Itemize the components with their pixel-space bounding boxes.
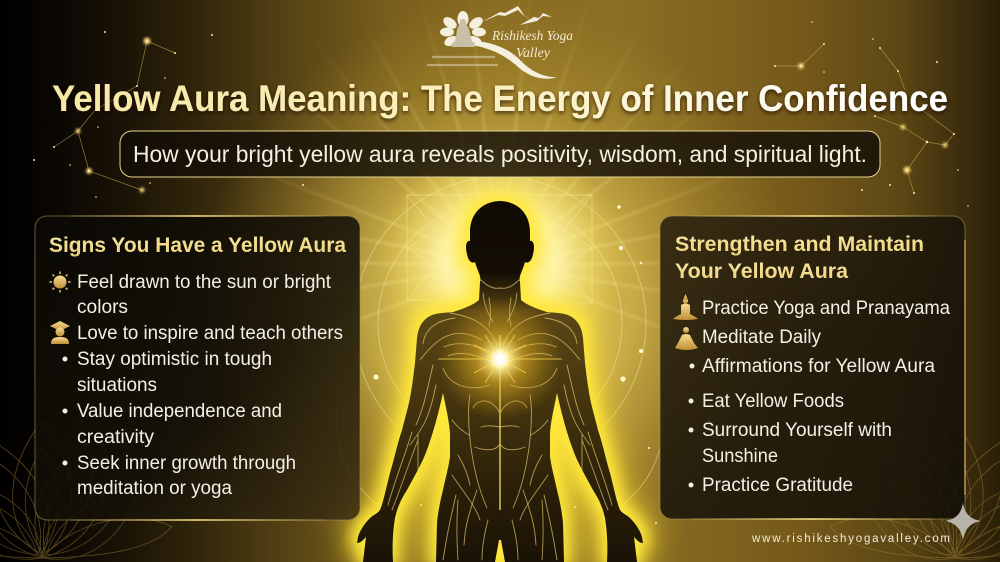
- website url: www.rishikeshyogavalley.com: [751, 533, 950, 545]
- icon: sun: [50, 272, 70, 292]
- list item continuation: Sunshine: [702, 446, 778, 467]
- bullets: [688, 364, 694, 488]
- list item: Love to inspire and teach others: [77, 323, 343, 344]
- list item: Practice Gratitude: [702, 475, 853, 496]
- panel: strengthen: [660, 216, 965, 519]
- logo swoosh: [477, 41, 557, 79]
- logo name second line: Valley: [516, 45, 550, 60]
- list item: Eat Yellow Foods: [702, 391, 844, 412]
- heart star glow: [438, 297, 562, 421]
- subtitle pill: How your bright yellow aura reveals positivity, wisdom, and spiritual light.: [133, 141, 867, 167]
- heading line one: Strengthen and Maintain: [675, 232, 924, 256]
- logo mountains: [482, 6, 552, 25]
- energy lines: [388, 280, 612, 560]
- list item: Feel drawn to the sun or bright: [77, 272, 332, 293]
- human figure silhouette: [357, 201, 643, 562]
- subtitle pill: [120, 131, 880, 177]
- list item continuation: creativity: [77, 427, 155, 448]
- panel: signs: [35, 216, 360, 520]
- list item: Practice Yoga and Pranayama: [702, 298, 950, 319]
- list item: Seek inner growth through: [77, 453, 296, 474]
- icon: yoga pose: [673, 294, 698, 320]
- icon: meditation: [675, 327, 698, 350]
- list item: Value independence and: [77, 401, 282, 422]
- background light rays: [100, 0, 900, 420]
- constellations: [33, 21, 969, 207]
- list item: Stay optimistic in tough: [77, 349, 272, 370]
- heading line two: Your Yellow Aura: [675, 259, 849, 283]
- icon: graduate: [50, 321, 70, 344]
- lotus outline left: [0, 421, 172, 562]
- sparkles: [373, 205, 657, 524]
- list item continuation: meditation or yoga: [77, 478, 232, 499]
- background wide glow: [200, 0, 800, 562]
- list item continuation: situations: [77, 375, 157, 396]
- figure aura wide glow: [357, 201, 643, 562]
- logo meditating figure: [451, 19, 475, 47]
- logo tagline: [427, 57, 498, 65]
- list item: Affirmations for Yellow Aura: [702, 356, 935, 377]
- centre energy line: [499, 335, 501, 510]
- logo: [427, 6, 573, 79]
- list item: Meditate Daily: [702, 327, 821, 348]
- logo lotus: [440, 11, 486, 48]
- heading: signs: Signs You Have a Yellow Aura: [49, 233, 347, 257]
- logo name: Rishikesh Yoga: [491, 28, 573, 43]
- list item: Surround Yourself with: [702, 420, 892, 441]
- central glow: [340, 130, 660, 400]
- figure aura tight glow: [357, 201, 643, 562]
- lotus outline right: [830, 421, 1000, 562]
- list item continuation: colors: [77, 297, 128, 318]
- figure body: [357, 201, 643, 562]
- icon: sparkle star: [945, 503, 981, 540]
- bullets: [62, 356, 68, 466]
- title: Yellow Aura Meaning: The Energy of Inner Confidence: [52, 77, 948, 119]
- sacred geometry: [337, 177, 663, 510]
